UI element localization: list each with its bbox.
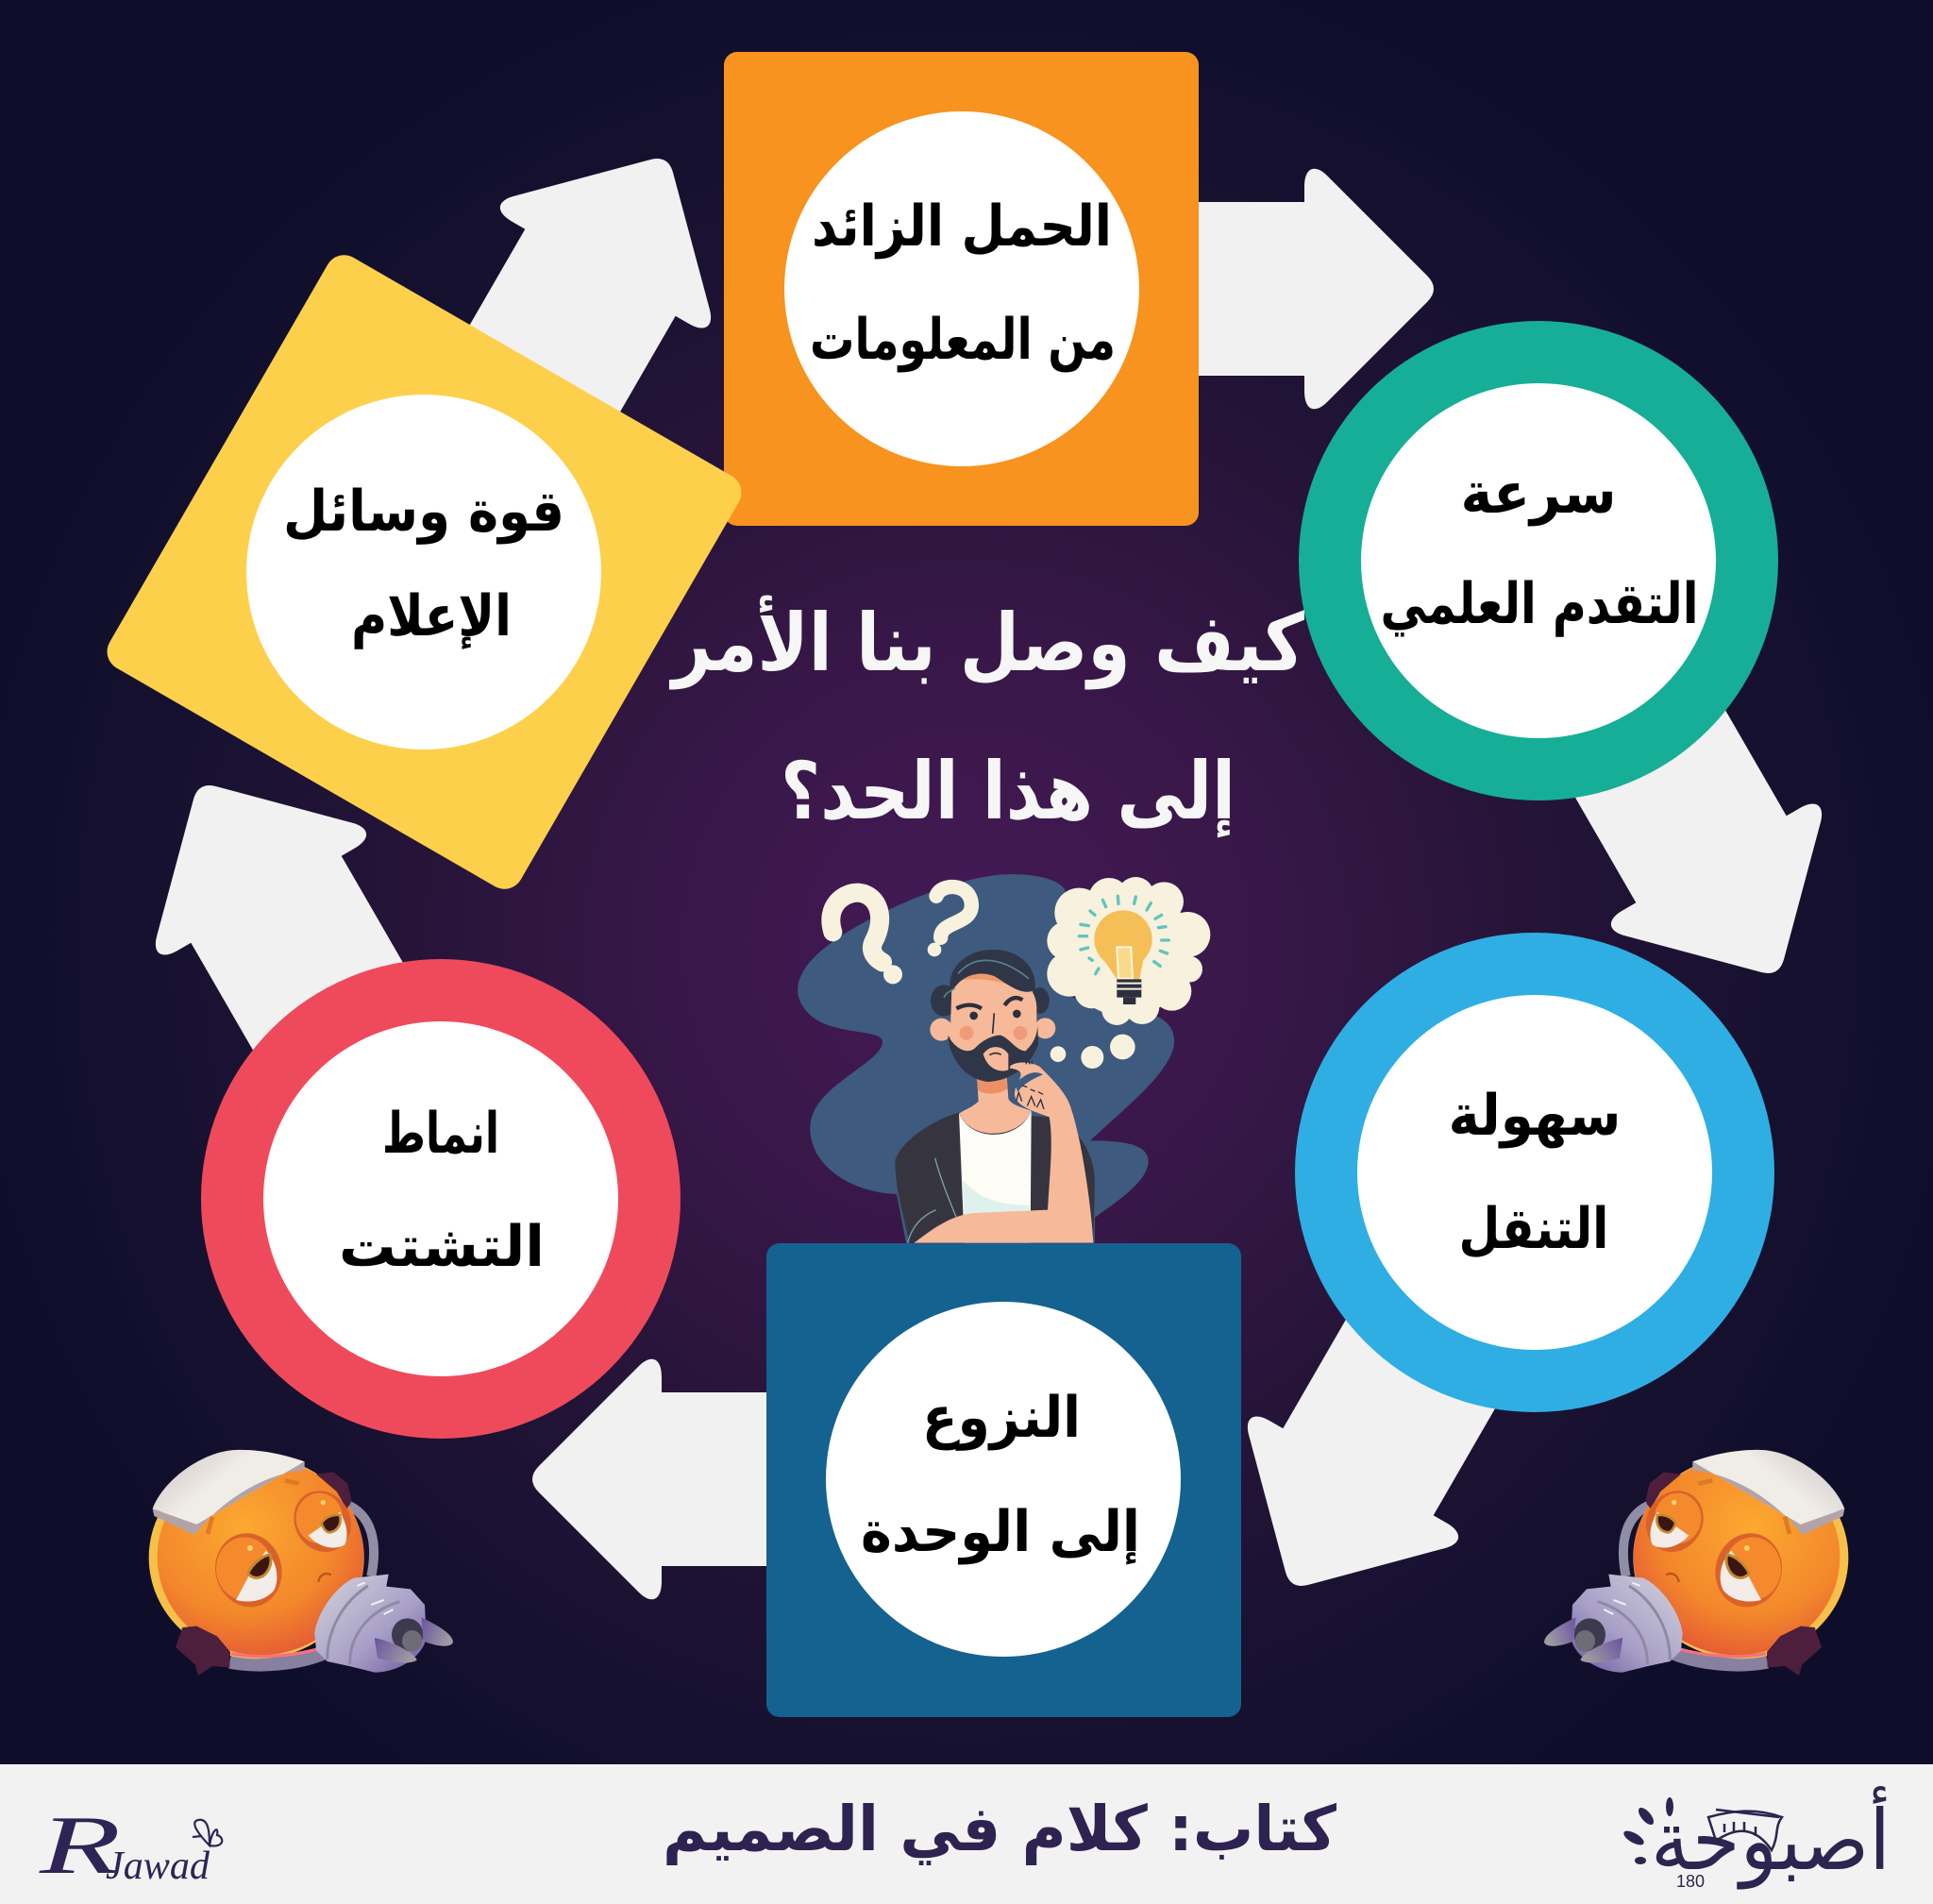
label: information overload <box>810 194 1116 373</box>
hair <box>950 950 1035 992</box>
illustration: sad astronaut right <box>1544 1450 1848 1676</box>
arrow: orange to teal <box>1157 169 1434 409</box>
label: ease of mobility <box>1448 1083 1622 1262</box>
label: power of the media: الإعلام <box>351 583 512 649</box>
logo: RJawad: Jawad <box>106 1845 210 1888</box>
panel: power of the media (yellow diamond) <box>100 248 748 896</box>
logo: RJawad: R <box>38 1800 121 1892</box>
icon: butterfly <box>193 1820 222 1845</box>
label: ease of mobility: التنقل <box>1459 1196 1608 1262</box>
title: كيف وصل بنا الأمر <box>669 595 1304 690</box>
label: ease of mobility: سهولة <box>1448 1083 1622 1149</box>
title: إلى هذا الحد؟ <box>781 745 1235 838</box>
label: distraction patterns: التشتت <box>339 1214 545 1280</box>
eyes and brows <box>969 1012 978 1019</box>
label: speed of scientific progress <box>1380 461 1699 637</box>
panel: speed of scientific progress (teal ring) <box>1299 321 1778 800</box>
arrow: yellow to orange <box>423 100 769 460</box>
logo: Osbouha 180: أصبوحة <box>1651 1786 1891 1890</box>
footer band <box>0 1764 1933 1904</box>
panel: information overload (orange square) <box>724 52 1199 526</box>
illustration: sad astronaut left <box>149 1450 453 1676</box>
label: power of the media <box>283 479 564 649</box>
illustration: thinking man <box>798 874 1210 1243</box>
title <box>669 595 1304 838</box>
logo: RJawad <box>38 1800 222 1892</box>
label: 180: 180 <box>1676 1872 1705 1891</box>
label: information overload: الحمل الزائد <box>812 194 1112 260</box>
label: power of the media: قوة وسائل <box>283 479 564 545</box>
ears <box>930 1019 952 1041</box>
label: information overload: من المعلومات <box>810 307 1116 373</box>
footer title: كتاب: كلام في الصميم <box>663 1793 1337 1866</box>
icon: sun rays <box>1622 1797 1673 1864</box>
cheeks <box>960 1026 973 1040</box>
panel: distraction patterns (red ring) <box>201 959 681 1439</box>
beard <box>948 1026 1038 1082</box>
label: distraction patterns <box>339 1101 545 1280</box>
label: tendency to solitude <box>861 1385 1140 1565</box>
forearm and hand <box>1010 1063 1093 1243</box>
t-shirt <box>959 1111 1032 1243</box>
panel: tendency to solitude (navy square) <box>766 1243 1241 1717</box>
icon: question marks <box>831 887 971 984</box>
label: speed of scientific progress: التقدم العلمي <box>1380 571 1699 637</box>
side hair <box>931 985 957 1017</box>
label: tendency to solitude: النزوع <box>922 1385 1081 1451</box>
arrow: red to yellow <box>97 727 444 1087</box>
arrow: navy to red <box>532 1359 809 1599</box>
icon: open book <box>1708 1810 1782 1850</box>
label: speed of scientific progress: سرعة <box>1461 461 1616 527</box>
label: tendency to solitude: إلى الوحدة <box>861 1499 1140 1565</box>
neck <box>960 1076 1032 1134</box>
arrow: blue to navy <box>1189 1285 1536 1644</box>
resting arm <box>914 1210 1048 1243</box>
jacket <box>895 1112 1095 1243</box>
face <box>950 968 1036 1079</box>
blob backdrop <box>798 874 1174 1243</box>
panel: ease of mobility (blue ring) <box>1295 933 1774 1412</box>
arrow: teal to blue <box>1534 672 1880 1032</box>
label: distraction patterns: انماط <box>382 1101 499 1167</box>
icon: thought cloud with light bulb <box>1047 877 1210 1069</box>
